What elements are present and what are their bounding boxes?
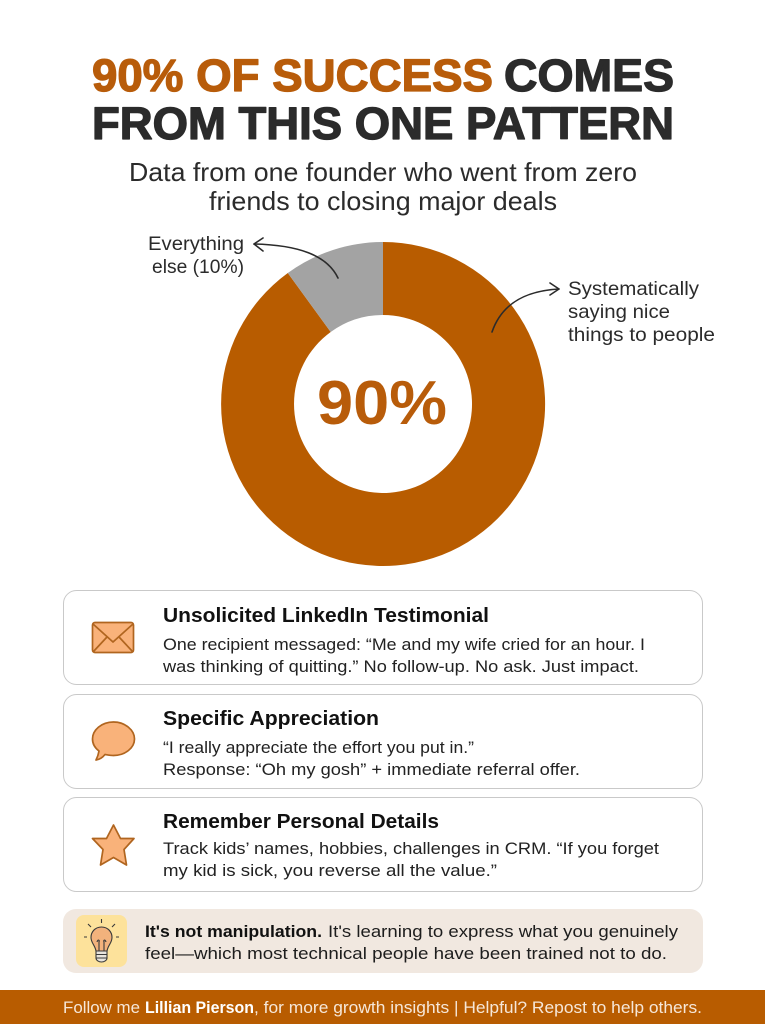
label: systematically saying nice things [568, 278, 715, 346]
label: everything else [148, 233, 244, 278]
subtitle [129, 157, 637, 216]
donut chart [221, 242, 545, 566]
segment: 10% [288, 242, 383, 332]
heading: Specific Appreciation [163, 708, 379, 730]
footer [0, 990, 765, 1024]
label: systematically saying nice things: saying nice [568, 301, 670, 323]
segment: 90% [221, 242, 545, 566]
body: was thinking of quitting.” No follow-up. No ask. Just impact. [162, 658, 639, 676]
footer text: , for more growth insights | Helpful? Repost to help others. [254, 999, 702, 1017]
body: One recipient messaged: “Me and my wife cried for an hour. I [163, 636, 645, 654]
title [92, 50, 674, 149]
callout [63, 909, 703, 973]
heading: Unsolicited LinkedIn Testimonial [163, 605, 489, 627]
title: 90% OF SUCCESS [92, 50, 493, 101]
callout text: It's not manipulation. [145, 922, 322, 941]
card: specific appreciation [64, 694, 702, 788]
body: Track kids’ names, hobbies, challenges in CRM. “If you forget [163, 840, 659, 858]
body: Response: “Oh my gosh” + immediate referral offer. [163, 761, 580, 779]
title: COMES [504, 50, 674, 101]
callout text: It's learning to express what you genuinely [328, 922, 679, 941]
icon: light bulb [76, 915, 127, 967]
card: unsolicited linkedin testimonial [64, 590, 702, 684]
icon: speech bubble [92, 722, 134, 760]
center value: 90% [317, 369, 447, 438]
icon: star [92, 825, 134, 865]
footer text [63, 999, 702, 1017]
icon: envelope [92, 622, 134, 652]
title: FROM THIS ONE PATTERN [92, 98, 674, 149]
body [163, 739, 580, 779]
label: systematically saying nice things: things to people [568, 324, 715, 346]
body [163, 840, 659, 880]
card: remember personal details [64, 798, 702, 892]
subtitle: friends to closing major deals [209, 186, 557, 216]
heading: Remember Personal Details [163, 811, 439, 833]
arrow: to systematically saying [492, 283, 559, 332]
subtitle: Data from one founder who went from zero [129, 157, 637, 187]
body: “I really appreciate the effort you put in.” [163, 739, 474, 757]
footer text: Lillian Pierson [145, 999, 254, 1017]
callout text: feel—which most technical people have been trained not to do. [145, 944, 667, 963]
footer text: Follow me [63, 999, 140, 1017]
label: everything else: else (10%) [152, 256, 244, 278]
body [162, 636, 645, 676]
label: everything else: Everything [148, 233, 244, 255]
arrow: to everything else [254, 238, 338, 278]
callout text [145, 922, 679, 963]
body: my kid is sick, you reverse all the value.” [163, 862, 497, 880]
label: systematically saying nice things: Systematically [568, 278, 699, 300]
